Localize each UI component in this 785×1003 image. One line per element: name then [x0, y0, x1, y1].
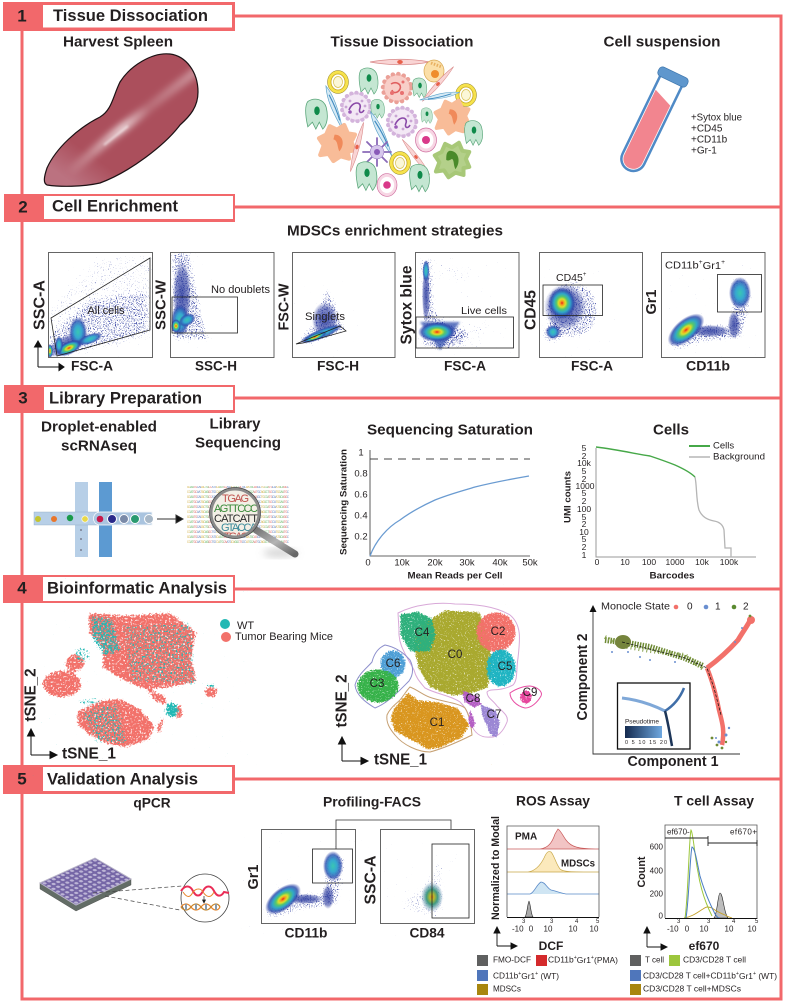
- x ticks: 5: [755, 919, 759, 925]
- outlines: [355, 603, 541, 752]
- chart: barcode rank plot: [562, 440, 765, 582]
- saturation limit dashed line: [370, 458, 530, 460]
- x ticks: 3: [707, 919, 711, 925]
- axis labels: profiling FACS: Gr1: [246, 864, 262, 890]
- x tick labels: 10k: [394, 558, 410, 568]
- gate labels: ef670-: [667, 828, 690, 836]
- heading: Library Sequencing: Library: [210, 416, 261, 432]
- y ticks: 600: [650, 842, 664, 852]
- heading: Profiling-FACS: Profiling-FACS: [323, 794, 421, 810]
- x ticks: 10: [725, 924, 734, 934]
- axis titles: [334, 674, 427, 768]
- illustration: sequencing reads and magnifier: CCATGCAATGCAGGCTGCCATGCAATGCAGGCTGCCATGCAATGCAGGCTGCCATGCAATGC: [187, 501, 289, 505]
- flow plot: FSC-A vs CD45: CD45: [556, 272, 583, 284]
- illustration: sequencing reads and magnifier: GCAATGCAGGCTGCCATGCAATGCAGGCTGCCATGCAATGCAGGCTGCCATGCAATGCAGGC: [187, 526, 289, 530]
- axis labels: SSC-W / SSC-H: SSC-W: [152, 279, 170, 330]
- heading 3: Library Preparation: 3: [18, 388, 28, 408]
- x ticks: 3: [677, 919, 681, 925]
- axis arrows: [644, 927, 667, 950]
- y ticks: 0: [659, 912, 664, 920]
- axis title y: Count: [636, 856, 648, 888]
- cluster labels: C7: [487, 709, 501, 721]
- illustration: sequencing reads and magnifier: CCATGCAATGCAGGCTGCCATGCAATGCAGGCTGCCATGCAATGCAGGCTGCCATGCAATGC: [187, 531, 289, 535]
- legend: T cell assay: CD3/CD28 T cell+MDSCs: [643, 984, 741, 994]
- illustration: sequencing reads and magnifier: CATCATT: [214, 513, 258, 525]
- legend: Tumor Bearing Mice: [235, 631, 333, 643]
- flow plot: CD11b vs Gr1: +: [721, 260, 726, 266]
- axis titles: [22, 668, 116, 762]
- trajectory branches: state 0: [707, 617, 752, 668]
- flow plot: FSC-H vs FSC-W singlets: [292, 252, 395, 358]
- axis titles: [575, 633, 719, 770]
- zoom dashed lines: [93, 886, 182, 910]
- x ticks: [667, 919, 759, 934]
- legend: ROS assay: CD11b: [493, 972, 517, 980]
- axis labels: FSC-W / FSC-H: FSC-W: [276, 283, 292, 330]
- y tick labels: 5: [582, 488, 587, 498]
- illustration: spleen: [44, 54, 198, 186]
- gates: [665, 836, 757, 846]
- legend: T cell assay: CD3/CD28 T cell: [683, 956, 746, 964]
- illustration: sequencing reads and magnifier: GCAATGCAGGCTGCCATGCAATGCAGGCTGCCATGCAATGCAGGCTGCCATGCAATGCAGGC: [187, 516, 289, 520]
- flow plot: FSC-A vs SSC-A all cells: [42, 252, 152, 362]
- arrow: chip to sequencing: [157, 515, 183, 523]
- chart: monocle trajectory: [575, 602, 755, 770]
- heading: Droplet-enabled scRNAseq: [41, 418, 157, 454]
- y tick labels: 0.4: [354, 510, 368, 522]
- x ticks: 4: [575, 919, 579, 925]
- heading: Droplet-enabled scRNAseq: Droplet-enabled: [41, 418, 157, 436]
- y ticks: 200: [650, 890, 664, 898]
- axis arrows: flow plots: [34, 341, 64, 370]
- illustration: sequencing reads and magnifier: GCAATGCAGGCTGCCATGCAATGCAGGCTGCCATGCAATGCAGGCTGCCATGCAATGCAGGC: [187, 486, 289, 490]
- inset: pseudotime: 0 5 10 15 20: [625, 740, 667, 746]
- x ticks: 3: [550, 919, 554, 925]
- x ticks: -10: [667, 924, 679, 934]
- illustration: sequencing reads and magnifier: TGAG: [222, 493, 249, 505]
- gate labels: ef670+: [730, 828, 757, 836]
- illustration: sequencing reads and magnifier: AGTTCCC: [214, 503, 258, 515]
- WT histogram: [507, 882, 599, 894]
- heading: Droplet-enabled scRNAseq: scRNAseq: [61, 438, 137, 454]
- axis title x: ef670: [689, 939, 720, 953]
- chart: T cell proliferation histogram: [636, 825, 759, 953]
- x tick labels: 20k: [427, 558, 443, 568]
- cluster labels: [370, 626, 537, 729]
- flow plot: FSC-A vs CD45: +: [583, 272, 587, 278]
- cells curve: [596, 447, 695, 477]
- axis labels: FSC-W / FSC-H: [276, 283, 359, 374]
- cluster labels: C6: [386, 658, 400, 670]
- y tick labels: 100: [577, 504, 591, 514]
- plot box: [507, 826, 599, 917]
- flow plot: CD11b vs Gr1: CD11b: [665, 260, 695, 272]
- y tick labels: [576, 443, 595, 560]
- x ticks: 10: [700, 924, 709, 934]
- icon: DNA amplification circle: [181, 874, 229, 922]
- chart axes: [370, 450, 530, 556]
- y tick labels: 5: [582, 534, 587, 544]
- trajectory backbone: [622, 642, 721, 715]
- flow plot: FSC-H vs FSC-W singlets: Singlets: [305, 311, 346, 323]
- cell: spindle top: [370, 59, 430, 65]
- flow plot: CD11b vs Gr1: Gr1: [703, 260, 722, 272]
- x ticks: 10: [569, 924, 578, 934]
- y tick labels: 1: [358, 448, 364, 458]
- heading 2: Cell Enrichment: 2: [18, 198, 28, 216]
- illustration: sequencing reads and magnifier: GCAATGCAGGCTGCCATGCAATGCAGGCTGCCATGCAATGCAGGCTGCCATGCAATGCAGGC: [187, 496, 289, 500]
- y tick labels: 10k: [577, 458, 592, 468]
- legend: [601, 602, 749, 612]
- chart: ROS assay histograms: [490, 816, 600, 953]
- inset: pseudotime: [618, 683, 690, 749]
- legend: [689, 440, 765, 462]
- y tick labels: 2: [582, 451, 587, 461]
- cluster labels: C2: [491, 626, 505, 638]
- FMO histogram: [525, 901, 533, 917]
- T cell peak: [714, 893, 728, 918]
- heading 5: Validation Analysis: 5: [17, 770, 27, 788]
- x tick labels: 10: [620, 557, 630, 567]
- PMA histogram: [507, 829, 599, 849]
- background curve: [695, 477, 731, 557]
- chart: sequencing saturation curve: [338, 448, 538, 582]
- heading 5: Validation Analysis: [3, 765, 781, 794]
- x ticks: 0: [685, 924, 690, 934]
- legend: ROS assay: [477, 955, 618, 995]
- axis labels: SSC-A / FSC-A: [32, 280, 113, 374]
- flow plot: SSC-H vs SSC-W no doublets: [170, 252, 274, 358]
- heading: Tissue Dissociation column: Tissue Dissociation: [330, 34, 474, 50]
- heading: Harvest Spleen: Harvest Spleen: [63, 34, 173, 50]
- heading: Library Sequencing: [195, 416, 281, 452]
- illustration: sequencing reads and magnifier: GCAATGCAGGCTGCCATGCAATGCAGGCTGCCATGCAATGCAGGCTGCCATGCAATGCAGGC: [187, 536, 289, 540]
- illustration: microfluidic droplet chip: [34, 482, 154, 557]
- illustration: test tube: [614, 66, 690, 177]
- y tick labels: 5: [582, 512, 587, 522]
- heading 4: Bioinformatic Analysis: 4: [17, 578, 27, 598]
- cells: tumor bearing mice: [42, 612, 218, 748]
- clusters: [413, 610, 492, 696]
- y ticks: 400: [650, 866, 664, 876]
- x tick labels: 40k: [492, 558, 508, 568]
- axis titles: Barcodes: [650, 570, 694, 582]
- y tick labels: 0.6: [354, 490, 368, 500]
- y tick labels: 0.8: [354, 468, 368, 480]
- axis labels: Gr1 / CD11b: [644, 290, 730, 374]
- y tick labels: 2: [582, 542, 587, 552]
- y tick labels: 0.2: [354, 532, 368, 542]
- flow plot: profiling CD11b vs Gr1: [260, 830, 356, 924]
- axis arrowhead: [590, 605, 596, 612]
- axes: [593, 610, 740, 754]
- cell: oval macrophage top right: [424, 60, 444, 82]
- legend: ROS assay: +: [535, 971, 538, 977]
- legend: 1: [715, 602, 721, 612]
- gate connector: [336, 820, 451, 849]
- y tick labels: 2: [582, 496, 587, 506]
- saturation curve: [370, 476, 529, 556]
- CD3/CD28 curve: [685, 830, 712, 918]
- x tick labels: [595, 557, 739, 567]
- legend: T cell assay: Gr1: [739, 972, 754, 980]
- axis labels: profiling FACS: [246, 856, 445, 940]
- heading 3: Library Preparation: Library Preparation: [49, 388, 202, 408]
- axis labels: profiling FACS: SSC-A: [362, 855, 380, 905]
- x tick labels: [365, 558, 538, 568]
- axis titles: Sequencing Saturation: [338, 449, 350, 555]
- axis titles: tSNE_2: [22, 668, 40, 722]
- y tick labels: [354, 448, 368, 542]
- heading: T cell Assay: T cell Assay: [674, 794, 755, 808]
- x tick labels: 100k: [720, 557, 739, 567]
- flow plot: FSC-A vs CD45: [540, 252, 642, 358]
- x ticks: 3: [522, 919, 526, 925]
- heading 1: Tissue Dissociation: [3, 2, 235, 31]
- MDSCs histogram: [507, 852, 599, 872]
- axis labels: Sytox blue / FSC-A: Sytox blue: [398, 265, 416, 344]
- axis arrows: [494, 927, 517, 949]
- illustration: sequencing reads and magnifier: CCATGCAATGCAGGCTGCCATGCAATGCAGGCTGCCATGCAATGCAGGCTGCCATGCAATGC: [187, 491, 289, 495]
- y tick labels: 5: [582, 466, 587, 476]
- axis titles: [562, 471, 694, 582]
- x tick labels: 0: [365, 558, 371, 568]
- illustration: dissociated tissue cells: [306, 59, 483, 196]
- illustration: sequencing reads and magnifier: CCATGCAATGCAGGCTGCCATGCAATGCAGGCTGCCATGCAATGCAGGCTGCCATGCAATGC: [187, 521, 289, 525]
- text: staining reagents: +CD11b: [691, 134, 728, 146]
- axes arrows: [338, 737, 368, 764]
- plot box: [665, 825, 757, 918]
- x tick labels: 50k: [522, 558, 538, 568]
- axis labels: CD45 / FSC-A: CD45: [522, 290, 540, 330]
- cluster labels: C9: [523, 687, 537, 699]
- histogram labels: MDSCs: [561, 858, 595, 870]
- inset: pseudotime: Pseudotime: [625, 718, 659, 726]
- y tick labels: 1: [582, 550, 587, 560]
- legend: T cell assay: +: [736, 971, 739, 977]
- text: staining reagents: +Sytox blue: [691, 112, 742, 124]
- cluster labels: C4: [415, 627, 430, 639]
- illustration: sequencing reads and magnifier: GTACCA: [221, 522, 258, 534]
- illustration: sequencing reads and magnifier: GCAATGCAGGCTGCCATGCAATGCAGGCTGCCATGCAATGCAGGCTGCCATGCAATGCAGGC: [187, 506, 289, 510]
- heading 2: Cell Enrichment: [4, 194, 781, 222]
- state 1 points: [611, 627, 743, 744]
- heading 4: Bioinformatic Analysis: [3, 575, 781, 603]
- illustration: sequencing reads and magnifier: CCATGCAATGCAGGCTGCCATGCAATGCAGGCTGCCATGCAATGCAGGCTGCCATGCAATGC: [187, 511, 289, 515]
- axis labels: FSC-W / FSC-H: FSC-H: [317, 358, 359, 374]
- heading 5: Validation Analysis: Validation Analysis: [47, 770, 198, 788]
- legend: ROS assay: +: [591, 955, 594, 961]
- histogram labels: PMA: [515, 832, 537, 842]
- illustration: sequencing reads and magnifier: [187, 486, 297, 557]
- legend: ROS assay: (WT): [538, 972, 559, 980]
- flow plot: CD11b vs Gr1: +: [699, 260, 703, 266]
- cluster labels: C0: [448, 649, 462, 661]
- histogram labels: [515, 832, 595, 870]
- heading: Cells: Cells: [653, 422, 689, 438]
- trajectory branch: state 2: [605, 640, 703, 666]
- axis labels: profiling FACS: CD11b: [284, 926, 328, 940]
- y tick labels: 5: [582, 443, 587, 453]
- axis labels: Gr1 / CD11b: Gr1: [644, 290, 660, 314]
- y ticks: [650, 842, 664, 920]
- axis labels: CD45 / FSC-A: FSC-A: [571, 358, 613, 374]
- flow plot: profiling CD84 vs SSC-A: [380, 830, 474, 924]
- scatter: tSNE by sample: [22, 612, 333, 762]
- illustration: sequencing reads and magnifier: TGAG: [224, 531, 249, 543]
- axis titles: Mean Reads per Cell: [408, 570, 502, 582]
- state 2 stray points: [711, 615, 751, 749]
- heading: Sequencing Saturation: Sequencing Saturation: [367, 422, 533, 438]
- axis labels: Sytox blue / FSC-A: [398, 265, 486, 374]
- axis title y: Normalized to Modal: [490, 816, 502, 920]
- cluster labels: C8: [466, 693, 480, 705]
- legend: T cell assay: (WT): [756, 972, 777, 980]
- illustration: sequencing reads and magnifier: CCATGCAATGCAGGCTGCCATGCAATGCAGGCTGCCATGCAATGCAGGCTGCCATGCAATGC: [187, 541, 289, 545]
- axis titles: Component 2: [575, 633, 591, 720]
- text: staining reagents: +CD45: [691, 124, 723, 134]
- flow plot: SSC-H vs SSC-W no doublets: No doublets: [211, 284, 270, 296]
- legend: Background: [713, 452, 765, 462]
- legend: T cell assay: [630, 955, 777, 995]
- legend: ROS assay: +: [518, 971, 521, 977]
- axis titles: tSNE_2: [334, 674, 350, 728]
- heading: ROS Assay: ROS Assay: [516, 794, 590, 808]
- heading: qPCR: qPCR: [133, 796, 171, 810]
- x ticks: -10: [512, 924, 524, 934]
- axis labels: Sytox blue / FSC-A: FSC-A: [444, 358, 486, 374]
- x ticks: [512, 919, 600, 934]
- heading 2: Cell Enrichment: Cell Enrichment: [52, 196, 178, 216]
- axis title x: DCF: [539, 939, 563, 953]
- heading 1: Tissue Dissociation: 1: [17, 6, 27, 26]
- cells: wild type: [74, 615, 215, 745]
- x tick labels: 10k: [695, 557, 710, 567]
- axis labels: SSC-A / FSC-A: FSC-A: [71, 358, 113, 374]
- axis titles: tSNE_1: [374, 752, 427, 768]
- axis labels: SSC-W / SSC-H: SSC-H: [195, 358, 237, 374]
- rank plot axes: [596, 448, 756, 557]
- y tick labels: 2: [582, 519, 587, 529]
- legend: ROS assay: MDSCs: [493, 984, 521, 994]
- axis labels: SSC-W / SSC-H: [152, 279, 237, 374]
- axes arrows: [28, 729, 57, 758]
- x ticks: 10: [544, 924, 553, 934]
- heading: MDSCs enrichment strategies: MDSCs enrichment strategies: [287, 222, 503, 240]
- legend: ROS assay: (PMA): [594, 956, 618, 964]
- x ticks: 10: [748, 924, 757, 934]
- y tick labels: 1000: [576, 481, 595, 491]
- heading 3: Library Preparation: [4, 385, 781, 413]
- axis titles: tSNE_1: [62, 746, 116, 762]
- legend: 0: [687, 602, 693, 612]
- heading: Library Sequencing: Sequencing: [195, 434, 281, 452]
- legend: ROS assay: Gr1: [521, 972, 536, 980]
- cluster labels: C5: [498, 661, 512, 673]
- legend: Cells: [713, 440, 734, 452]
- x tick labels: 100: [642, 557, 656, 567]
- x ticks: 4: [732, 919, 736, 925]
- legend: T cell assay: CD3/CD28 T cell+CD11b: [643, 972, 732, 980]
- flow plot: FSC-A vs SSC-A all cells: All cells: [88, 305, 125, 317]
- axis titles: [338, 449, 502, 582]
- axis titles: Component 1: [628, 754, 719, 770]
- axis labels: Gr1 / CD11b: CD11b: [686, 358, 730, 374]
- scatter: tSNE clusters C0-C9: [334, 603, 541, 768]
- cluster labels: C3: [370, 678, 384, 690]
- x tick labels: 30k: [459, 558, 475, 568]
- cluster labels: C1: [430, 717, 444, 729]
- legend: ROS assay: FMO-DCF: [493, 956, 531, 964]
- x ticks: 10: [590, 924, 599, 934]
- MDSC curve: [684, 907, 732, 918]
- flow plot: CD11b vs Gr1: [662, 252, 765, 358]
- heading 4: Bioinformatic Analysis: Bioinformatic Analysis: [47, 578, 227, 598]
- x tick labels: 1000: [666, 557, 685, 567]
- legend: [220, 619, 333, 643]
- axis titles: UMI counts: [562, 471, 574, 523]
- flow plot: FSC-A vs Sytox blue live cells: [416, 252, 519, 358]
- illustration: qPCR plate: [40, 858, 131, 911]
- x ticks: 5: [596, 919, 600, 925]
- y tick labels: 2: [582, 474, 587, 484]
- gate labels: [667, 828, 757, 836]
- axis labels: SSC-A / FSC-A: SSC-A: [32, 280, 48, 330]
- legend: ROS assay: +: [574, 955, 577, 961]
- text: staining reagents: +Gr-1: [691, 146, 717, 156]
- x ticks: 0: [529, 924, 534, 934]
- heading 1: Tissue Dissociation: Tissue Dissociation: [53, 6, 208, 25]
- flow plot: FSC-A vs Sytox blue live cells: Live cells: [461, 305, 507, 317]
- axis labels: CD45 / FSC-A: [522, 290, 613, 374]
- text: staining reagents: [691, 112, 742, 156]
- y tick labels: 10: [579, 527, 589, 537]
- axis labels: profiling FACS: CD84: [410, 926, 445, 940]
- WT curve: [686, 847, 720, 918]
- legend: T cell assay: +: [753, 971, 756, 977]
- legend: WT: [237, 620, 254, 632]
- legend: Monocle State: [601, 602, 670, 612]
- legend: 2: [743, 602, 749, 612]
- heading: Cell suspension: Cell suspension: [604, 34, 720, 50]
- legend: T cell assay: T cell: [645, 956, 664, 964]
- legend: ROS assay: Gr1: [577, 956, 592, 964]
- legend: ROS assay: CD11b: [548, 956, 572, 964]
- x tick labels: 0: [595, 557, 600, 567]
